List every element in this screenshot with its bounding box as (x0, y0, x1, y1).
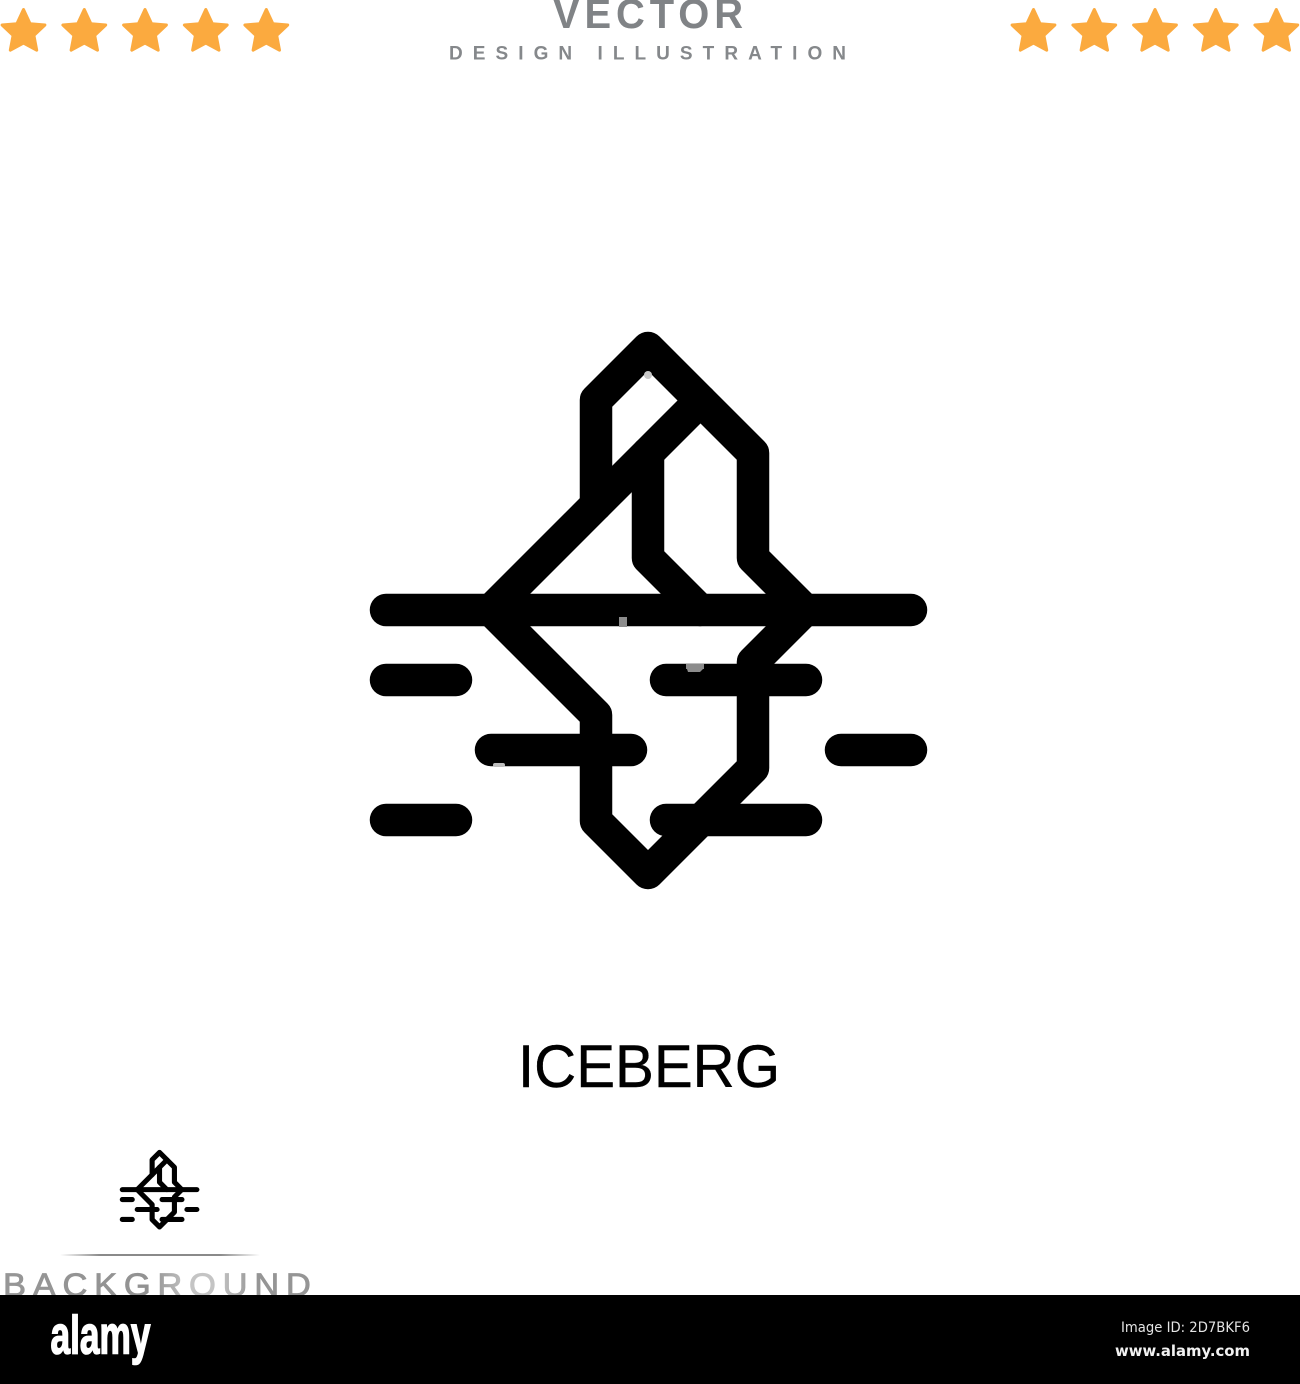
iceberg inner facet (648, 453, 700, 610)
watermark remnants over icon (493, 371, 704, 767)
website url: www.alamy.com (1115, 1342, 1250, 1360)
iceberg tip above water (596, 348, 805, 610)
water surface line (386, 594, 911, 626)
alamy logo: alamy (50, 1306, 150, 1366)
footer bar (0, 1295, 1300, 1384)
image id: Image ID: 2D7BKF6 (1121, 1320, 1250, 1336)
small iceberg icon (122, 1152, 197, 1227)
divider above background label (60, 1254, 260, 1256)
main icon: iceberg (386, 348, 911, 873)
iceberg submerged body (491, 610, 805, 873)
label: BACKGROUND: BACKGROUND (3, 1268, 311, 1304)
iceberg ridge diagonal (491, 400, 700, 610)
water dashes row 1 (386, 664, 806, 696)
icon title: ICEBERG: ICEBERG (518, 1033, 780, 1100)
left star rating (2, 10, 288, 50)
water dashes row 2 (491, 734, 911, 766)
header: DESIGN ILLUSTRATION: DESIGN ILLUSTRATION (449, 44, 846, 64)
right star rating (1012, 10, 1298, 50)
water dashes row 3 (386, 804, 806, 836)
